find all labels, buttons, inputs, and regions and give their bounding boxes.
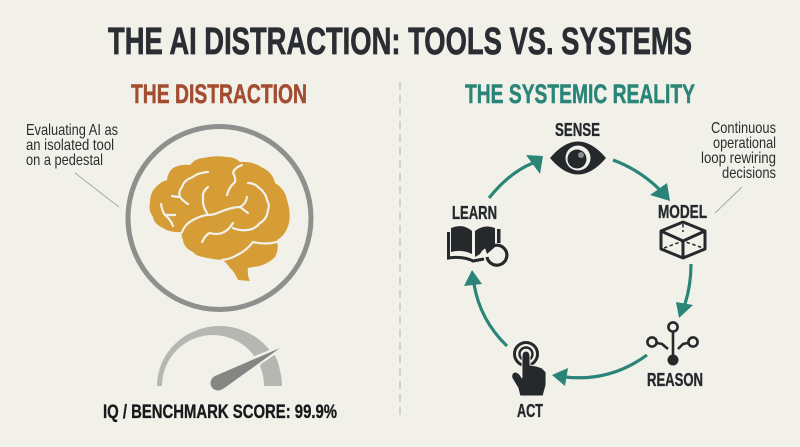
gauge score label: IQ / BENCHMARK SCORE: 99.9% bbox=[103, 401, 337, 423]
callout: continuous loop: operational bbox=[713, 135, 776, 152]
arrow: sense to model bbox=[613, 160, 670, 201]
arrow: learn to sense bbox=[489, 155, 543, 198]
node: reason: REASON bbox=[647, 370, 703, 390]
arrow: act to learn bbox=[464, 270, 507, 346]
arrow: model to reason bbox=[676, 264, 693, 318]
callout: continuous loop: Continuous bbox=[711, 120, 776, 137]
callout: continuous loop: loop rewiring bbox=[701, 150, 776, 167]
callout: evaluating AI: Evaluating AI as bbox=[26, 122, 118, 139]
node: model: MODEL bbox=[658, 202, 707, 222]
node: learn: LEARN bbox=[452, 203, 497, 223]
callout: evaluating AI: an isolated tool bbox=[26, 137, 114, 154]
node: act: ACT bbox=[517, 401, 543, 421]
arrow: reason to act bbox=[552, 355, 647, 386]
node: act bbox=[512, 342, 546, 421]
callout: continuous loop bbox=[701, 120, 776, 213]
heading: the distraction: THE DISTRACTION bbox=[131, 79, 307, 109]
callout: continuous loop: decisions bbox=[722, 165, 776, 182]
callout: evaluating AI: on a pedestal bbox=[26, 152, 103, 169]
heading: the systemic reality: THE SYSTEMIC REALITY bbox=[465, 79, 695, 109]
icon: brain on pedestal bbox=[128, 126, 311, 310]
node: reason bbox=[647, 322, 703, 390]
node: learn bbox=[448, 203, 507, 265]
node: model bbox=[658, 202, 707, 258]
gauge bbox=[157, 326, 282, 390]
node: sense: SENSE bbox=[555, 120, 600, 140]
node: sense bbox=[550, 120, 606, 174]
callout: evaluating AI bbox=[26, 122, 119, 207]
